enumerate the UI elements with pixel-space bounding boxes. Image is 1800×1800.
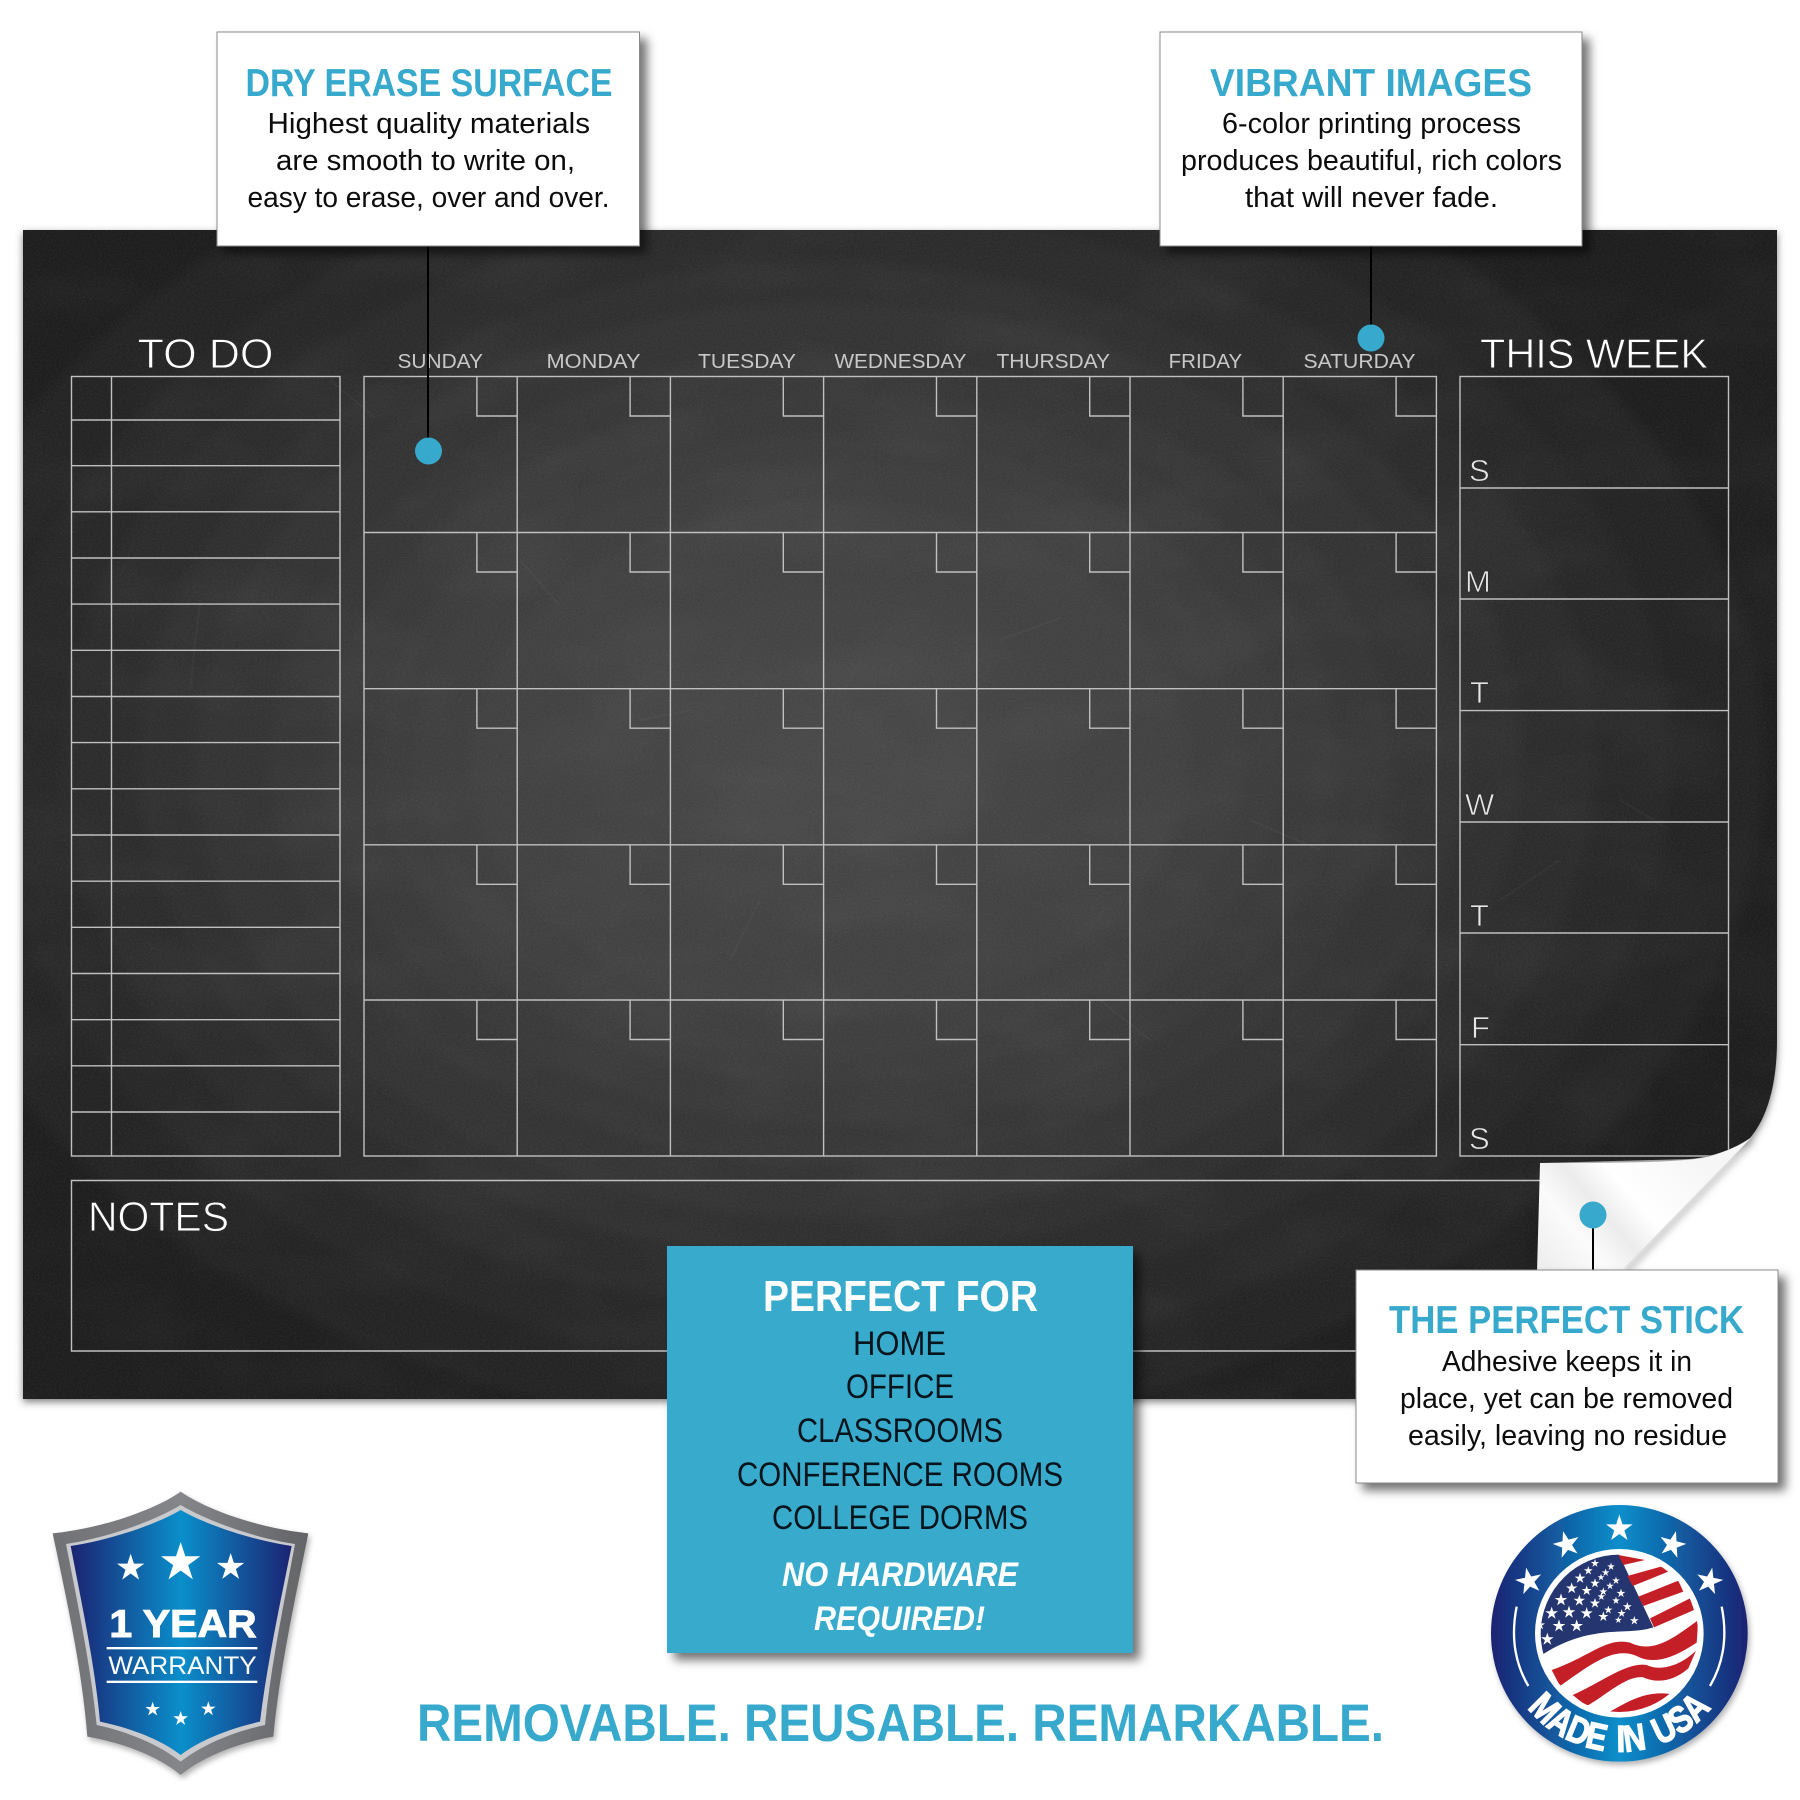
callout heading: DRY ERASE SURFACE	[246, 62, 612, 105]
this week column: T	[1470, 675, 1489, 710]
no hardware note: REQUIRED!	[814, 1600, 985, 1638]
panel: perfect for	[667, 1246, 1133, 1653]
no hardware note	[782, 1556, 1019, 1638]
callout body: easy to erase, over and over.	[248, 182, 610, 214]
calendar weekday headers: WEDNESDAY	[834, 351, 966, 373]
shield text: WARRANTY	[108, 1652, 257, 1680]
peeled corner	[1537, 1137, 1752, 1272]
callout body	[1400, 1346, 1733, 1452]
callout heading: THE PERFECT STICK	[1389, 1299, 1744, 1342]
board background	[23, 230, 1777, 1399]
calendar weekday headers: MONDAY	[546, 351, 640, 373]
callout body: produces beautiful, rich colors	[1181, 145, 1562, 177]
callout body	[1181, 108, 1562, 214]
badge side arcs	[1514, 1607, 1724, 1686]
this week column: W	[1465, 787, 1495, 822]
use list: HOME	[853, 1325, 946, 1363]
callout body: are smooth to write on,	[276, 145, 575, 177]
shield stars	[117, 1542, 244, 1725]
use list: OFFICE	[846, 1368, 954, 1406]
badge: 1 year warranty shield	[53, 1492, 308, 1775]
chalkboard calendar poster	[23, 230, 1777, 1400]
badge text: MADE IN USA	[1528, 1690, 1712, 1752]
this week column: S	[1469, 453, 1490, 488]
this week column: F	[1471, 1010, 1490, 1045]
flag	[1540, 1554, 1698, 1712]
this week column: S	[1469, 1121, 1490, 1156]
callout body: Adhesive keeps it in	[1442, 1346, 1692, 1378]
use list	[737, 1325, 1063, 1537]
callout body: easily, leaving no residue	[1408, 1420, 1727, 1452]
callout: vibrant images	[1160, 32, 1582, 246]
badge stars	[1513, 1515, 1725, 1595]
callout: dry erase surface	[217, 32, 640, 246]
callout pointer: vibrant images	[1358, 240, 1384, 352]
calendar weekday headers: SUNDAY	[398, 351, 483, 373]
callout: the perfect stick	[1356, 1270, 1778, 1483]
this week column: M	[1465, 564, 1491, 599]
to do checklist grid	[72, 376, 340, 1156]
callout pointer: perfect stick	[1580, 1202, 1606, 1275]
use list: COLLEGE DORMS	[772, 1499, 1028, 1537]
notes box	[72, 1180, 1540, 1351]
use list: CLASSROOMS	[797, 1412, 1003, 1450]
callout body: 6-color printing process	[1222, 108, 1521, 140]
notes box: NOTES	[88, 1193, 229, 1240]
badge: made in USA	[1490, 1505, 1753, 1768]
callout body: place, yet can be removed	[1400, 1383, 1733, 1415]
callout body	[248, 108, 610, 214]
shield text: 1 YEAR	[109, 1602, 257, 1646]
calendar weekday headers	[398, 351, 1416, 373]
panel heading: PERFECT FOR	[763, 1272, 1038, 1321]
calendar weekday headers: TUESDAY	[698, 351, 796, 373]
chalk texture	[23, 230, 1777, 1400]
calendar weekday headers: THURSDAY	[996, 351, 1110, 373]
callout heading: VIBRANT IMAGES	[1210, 62, 1532, 105]
this week column: T	[1470, 898, 1489, 933]
shield text	[107, 1602, 257, 1683]
to do heading: TO DO	[138, 330, 274, 377]
callout body: that will never fade.	[1245, 182, 1498, 214]
use list: CONFERENCE ROOMS	[737, 1456, 1063, 1494]
callout body: Highest quality materials	[268, 108, 590, 140]
calendar month grid	[364, 376, 1436, 1156]
callout pointer: dry erase	[415, 240, 442, 464]
calendar weekday headers: SATURDAY	[1304, 351, 1416, 373]
this week heading: THIS WEEK	[1480, 330, 1708, 377]
tagline: REMOVABLE. REUSABLE. REMARKABLE.	[417, 1694, 1384, 1753]
this week column	[1460, 376, 1728, 1156]
no hardware note: NO HARDWARE	[782, 1556, 1019, 1594]
calendar weekday headers: FRIDAY	[1169, 351, 1242, 373]
